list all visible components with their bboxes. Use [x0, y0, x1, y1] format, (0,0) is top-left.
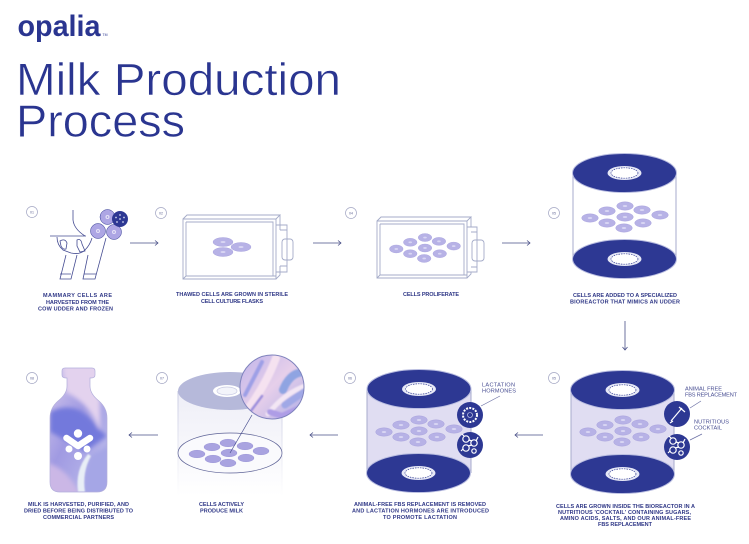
step 02: flask: 02: [159, 211, 163, 215]
icon: bottle: [50, 368, 108, 492]
caption: CELLS PROLIFERATE: [403, 292, 459, 298]
caption: DRIED BEFORE BEING DISTRIBUTED TO: [24, 508, 134, 514]
caption: MILK IS HARVESTED, PURIFIED, AND: [28, 502, 129, 508]
step 05b: cocktail: 05: [552, 376, 556, 380]
caption: [199, 502, 244, 514]
arrow: [515, 432, 543, 438]
icon: faded bioreactor: [178, 372, 282, 496]
caption: THAWED CELLS ARE GROWN IN STERILE: [176, 292, 288, 298]
caption: CELL CULTURE FLASKS: [201, 299, 263, 305]
callout labels: FBS REPLACEMENT: [685, 392, 738, 398]
step 06: hormones: 06: [348, 376, 352, 380]
step 07: produce milk: [156, 355, 308, 514]
arrow: [130, 240, 158, 246]
arrow: [502, 240, 530, 246]
callout labels: [685, 386, 738, 432]
caption: COW UDDER AND FROZEN: [38, 306, 113, 312]
icon: cow udder: [50, 210, 106, 279]
icon: bioreactor: [572, 154, 676, 278]
icon: flask with 3 cells: [183, 215, 293, 279]
logo: opalia: [18, 10, 101, 43]
caption: COMMERCIAL PARTNERS: [43, 515, 114, 521]
arrow: [313, 240, 341, 246]
caption: ANIMAL-FREE FBS REPLACEMENT IS REMOVED: [354, 502, 486, 508]
step 01: mammary cells: [26, 206, 128, 312]
logo: TM: [102, 33, 108, 37]
arrow down: [622, 321, 628, 350]
caption: AND LACTATION HORMONES ARE INTRODUCED: [352, 508, 489, 514]
title: Milk Production: [16, 54, 341, 105]
caption: [24, 502, 134, 521]
icon: bioreactor with hormones: [366, 370, 500, 492]
caption: PRODUCE MILK: [200, 508, 243, 514]
caption: HARVESTED FROM THE: [46, 300, 109, 306]
callout label: HORMONES: [482, 388, 516, 394]
icon: magnifier: [240, 355, 308, 419]
step 05: bioreactor: [548, 154, 680, 306]
caption: NUTRITIOUS 'COCKTAIL' CONTAINING SUGARS,: [558, 510, 691, 516]
arrow: [129, 432, 158, 438]
caption: MAMMARY CELLS ARE: [43, 293, 112, 299]
caption: [38, 293, 113, 312]
caption: CELLS ARE GROWN INSIDE THE BIOREACTOR IN A: [556, 504, 695, 510]
step 02: flask: [156, 208, 293, 305]
step 01: mammary cells: 01: [30, 210, 34, 214]
caption: [352, 502, 489, 521]
step 08: milk bottle: 08: [30, 376, 34, 380]
caption: [570, 293, 680, 306]
icon: flask with cells: [377, 217, 484, 278]
icon: cells: [90, 210, 128, 240]
step 05: bioreactor: 05: [552, 211, 556, 215]
caption: AMINO ACIDS, SALTS, AND OUR ANIMAL-FREE: [560, 516, 691, 522]
caption: FBS REPLACEMENT: [598, 522, 653, 528]
caption: CELLS ARE ADDED TO A SPECIALIZED: [573, 293, 677, 299]
caption: [556, 504, 695, 528]
caption: CELLS ACTIVELY: [199, 502, 244, 508]
callout labels: NUTRITIOUS: [694, 420, 729, 426]
step 04: flask proliferate: 04: [349, 211, 353, 215]
caption: BIOREACTOR THAT MIMICS AN UDDER: [570, 300, 680, 306]
title: [16, 54, 341, 146]
arrow: [310, 432, 338, 438]
callout labels: COCKTAIL: [694, 426, 722, 432]
icon: bioreactor with additives: [570, 370, 702, 494]
callout label: [482, 382, 516, 394]
step 05b: cocktail: [548, 370, 738, 528]
step 08: milk bottle: [24, 360, 134, 521]
callout labels: ANIMAL FREE: [685, 386, 722, 392]
callout label: LACTATION: [482, 382, 515, 388]
caption: [176, 292, 288, 305]
step 06: hormones: [344, 370, 516, 521]
step 04: flask proliferate: [346, 208, 484, 298]
step 07: produce milk: 07: [160, 376, 164, 380]
icon: opalia mark: [66, 429, 90, 460]
title: Process: [16, 96, 185, 146]
caption: TO PROMOTE LACTATION: [383, 515, 457, 521]
